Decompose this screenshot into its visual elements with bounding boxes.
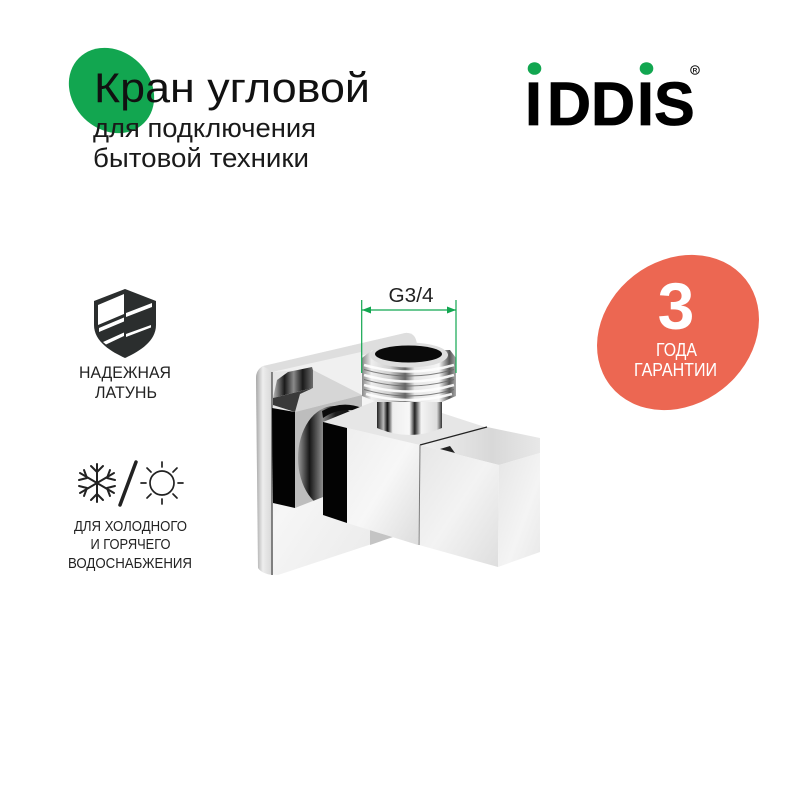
- logo: IDDIS: R: [693, 68, 698, 74]
- icon: shield: [94, 289, 156, 358]
- warranty badge: ГАРАНТИИ: [634, 360, 717, 380]
- square nut: [272, 370, 370, 510]
- icon: snowflake: [79, 464, 115, 502]
- thread: [362, 342, 456, 402]
- label: brass: ЛАТУНЬ: [95, 383, 157, 402]
- subtitle: для подключения: [93, 113, 316, 143]
- wall plate: [256, 333, 417, 575]
- dimension: G3/4: [362, 285, 456, 373]
- warranty badge: 3: [658, 269, 694, 343]
- warranty badge: [566, 223, 790, 442]
- green blob: [51, 30, 172, 151]
- label: cold and hot water: И ГОРЯЧЕГО: [90, 536, 170, 553]
- label: cold and hot water: ВОДОСНАБЖЕНИЯ: [68, 555, 192, 572]
- logo: IDDIS: IDDIS: [525, 70, 695, 138]
- neck: [377, 398, 442, 435]
- label: brass: НАДЕЖНАЯ: [79, 363, 171, 382]
- label: cold and hot water: ДЛЯ ХОЛОДНОГО: [74, 518, 187, 535]
- subtitle: бытовой техники: [93, 143, 309, 173]
- collar behind nut: [273, 367, 314, 398]
- faucet product image: [256, 333, 540, 575]
- subtitle: [93, 113, 316, 173]
- icon: sun: [141, 462, 183, 504]
- icon: slash: [120, 462, 136, 505]
- valve body: [323, 400, 485, 545]
- title: Кран угловой: [94, 64, 370, 111]
- warranty badge: ГОДА: [656, 340, 697, 360]
- label: cold and hot water: [68, 518, 192, 572]
- handle: [419, 427, 540, 567]
- dimension: G3/4: G3/4: [388, 285, 434, 307]
- label: brass: [79, 363, 171, 402]
